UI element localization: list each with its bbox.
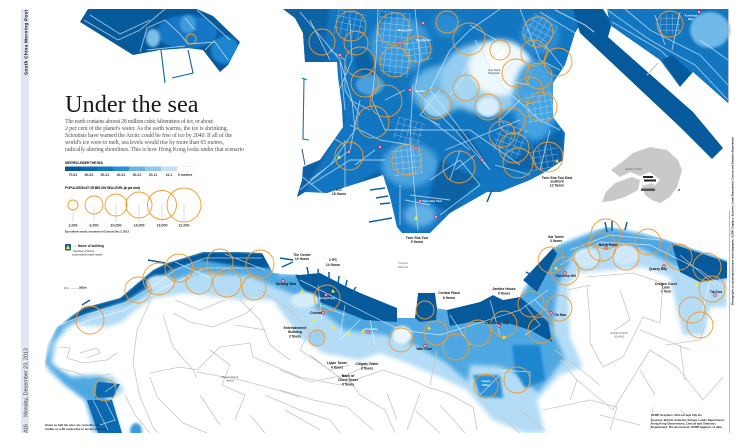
place labels: Hong Kong Island: Hong Kong [319, 296, 335, 300]
place labels: Kowloon: Kowloon [685, 14, 697, 18]
place labels: Hong Kong Island: 9 floors [498, 292, 510, 296]
place labels: Hong Kong Island: Bank of [342, 374, 355, 378]
place labels: Kowloon: Yau Ma Tei [415, 38, 431, 42]
intro text: world's ice were to melt, sea levels would rise by more than 65 metres, [65, 140, 224, 146]
newspaper name: South China Morning Post [23, 10, 28, 75]
place labels: Hong Kong Island: Dragon Court [655, 282, 678, 286]
scale bar [64, 286, 87, 290]
legend: metres under the sea: 70-61 [69, 173, 77, 177]
Hong Kong locator map [602, 147, 682, 203]
legend: population circles: 6,000 [90, 224, 98, 228]
place labels: Kowloon: Bay [688, 17, 694, 21]
intro text: 2 per cent of the planet's water. As the earth warms, the ice is shrinking. [65, 125, 228, 132]
footnote: left: Given as half the sites are currently not [45, 423, 99, 427]
place labels: Hong Kong Island: Admiralty [364, 327, 378, 331]
place labels: Kowloon: Mountain [488, 71, 500, 75]
place labels: Hong Kong Island: HONG KONG [610, 331, 628, 335]
place labels: Kowloon: Jordan [415, 89, 425, 93]
legend: population circles: 22,000 [178, 224, 190, 228]
place labels: Hong Kong Island: Aberd [226, 378, 234, 382]
legend: population circles: 14,000 [134, 224, 144, 228]
place labels: Kowloon: Tsim Sha Tsui [422, 199, 442, 203]
legend: population circles: 10,000 [110, 224, 122, 228]
place labels: Hong Kong Island: Citigate Tower [355, 362, 379, 366]
title: Under the sea [65, 91, 199, 118]
place labels: Kowloon: 5 floors [411, 240, 423, 244]
place labels: Hong Kong Island: 3 floors [550, 239, 562, 243]
place labels: Hong Kong Island: 3 floors [361, 366, 373, 370]
MTR stations [282, 11, 716, 347]
place labels: Hong Kong Island: China Tower [338, 378, 359, 382]
markers: submerged buildings [300, 155, 699, 338]
place labels: Hong Kong Island: North Point [599, 243, 618, 247]
place labels: Hong Kong Island: Central Plaza [438, 291, 460, 295]
place labels: Hong Kong Island: Lane [662, 286, 670, 290]
place labels: Hong Kong Island: Happy [481, 379, 491, 383]
place labels: Hong Kong Island: Aia Tower [548, 235, 565, 239]
legend: metres under the sea: 0 metres [178, 173, 192, 177]
place labels: Hong Kong Island: Central [310, 311, 322, 315]
intro text [65, 118, 244, 153]
footnote: right: Hong Kong Observatory, Census and Statistics [651, 422, 716, 426]
place labels: Kowloon: seafront [550, 180, 565, 184]
legend: metres under the sea: 20-11 [149, 173, 157, 177]
place labels: Kowloon: Tsim Sha Tsui [406, 236, 428, 240]
Hong Kong locator map: N [677, 189, 681, 191]
legend: population circles: By a whole sector, increases in Census Dec 3, 2013 [65, 230, 129, 234]
place labels: Hong Kong Island: Jardine House [492, 287, 516, 291]
place labels: Hong Kong Island: Quarry Bay [649, 267, 667, 271]
side strip [21, 9, 30, 433]
legend: metres under the sea: 50-41 [101, 173, 109, 177]
page date: Monday, December 23, 2013 [24, 348, 30, 417]
legend: metres under the sea: 10-1 [166, 173, 173, 177]
place labels: Hong Kong Island: 6 floors [443, 296, 455, 300]
place labels: Hong Kong Island: The Center [293, 253, 312, 257]
footnote: right [651, 413, 725, 429]
legend: building marker [65, 244, 104, 256]
footnote: right: SCMP Graphics: Alfie Ho and Ally Ko [651, 413, 702, 417]
legend: population circles: 18,000 [156, 224, 168, 228]
place labels: Hong Kong Island [222, 235, 722, 387]
legend: population circles [65, 186, 201, 234]
place labels: Hong Kong Island: 3 floors [342, 382, 354, 386]
right margin credit: Photographs of submerged features and infographic: SCMP Graphics. Sources: Lands Department, Census and Statistics Department [730, 137, 734, 305]
place labels: Hong Kong Island: Lippo Tower [327, 361, 348, 365]
scale bar: 0 m [64, 286, 70, 290]
place labels: Hong Kong Island: Victoria [398, 261, 408, 265]
place labels: Hong Kong Island: Tai Koo [710, 290, 722, 294]
place labels: Hong Kong Island: Tin Hau [554, 313, 566, 317]
legend: metres under the sea [65, 161, 194, 177]
intro text: Scientists have warned the Arctic could be free of ice by 2040. If all of the [65, 132, 232, 139]
footnote: right: Department, The Economist, SCMP analysis of data [651, 425, 722, 429]
scale bar: 500m [79, 286, 87, 290]
map: West Kowloon corner [80, 9, 240, 84]
place labels: Hong Kong Island: Causeway Bay [485, 321, 509, 325]
footnote: right: Sources: British Antarctic Survey, Lands Department, [651, 418, 725, 422]
map: Hong Kong Island coastal flooding [45, 221, 727, 439]
place labels: Hong Kong Island: Building [288, 330, 302, 334]
legend: population circles: 2,000 [68, 224, 78, 228]
place labels: Hong Kong Island: 2 floors [289, 334, 301, 338]
place labels: Hong Kong Island: 2 IFC [329, 258, 338, 262]
place labels: Hong Kong Island: Fortress Hill [556, 274, 576, 278]
place labels: Hong Kong Island: Entertainment [284, 326, 307, 330]
map: hill roads [58, 273, 723, 433]
piers: north shore [82, 221, 627, 305]
legend: metres under the sea: 40-31 [117, 173, 125, 177]
legend: building marker: Number of floors [73, 249, 95, 253]
legend: population circles: POPULATION AT OR BELOW SEA LEVEL (in per cent) [65, 186, 140, 190]
place labels: Hong Kong Island: 1 floor [661, 290, 672, 294]
legend: building marker: Name of building [78, 244, 104, 248]
place labels: Kowloon: Tsim Sha Tsui East [542, 176, 573, 180]
place labels: Hong Kong Island: Wan Chai [416, 347, 432, 351]
place labels: Hong Kong Island: 4 floors [331, 366, 343, 370]
place labels: Hong Kong Island: Harbour [398, 265, 408, 269]
Hong Kong locator map: HONG KONG [625, 167, 642, 171]
footnote: left [45, 423, 107, 431]
place labels: Kowloon: Lion Rock [488, 68, 501, 72]
map: north-east Kowloon [606, 9, 730, 103]
place labels: Kowloon: 12 floors [550, 184, 564, 188]
right margin rule [728, 9, 730, 433]
legend: metres under the sea: 30-21 [133, 173, 141, 177]
place labels: Kowloon: Mong Kok [398, 28, 413, 32]
place labels: Hong Kong Island: Valley [482, 383, 491, 387]
place labels: Hong Kong Island: Mount Cheek [222, 375, 239, 379]
circles: population [76, 11, 725, 401]
page number: A16 [24, 424, 30, 433]
map: runway and typhoon shelter [302, 9, 723, 165]
map: Kowloon peninsula [283, 9, 578, 233]
place labels: Hong Kong Island: 14 floors [326, 263, 340, 267]
legend: building marker: submerged under water [72, 252, 104, 256]
place labels: Kowloon: ICC [336, 188, 342, 192]
place labels: Hong Kong Island: Sheung Wan [276, 282, 296, 286]
footnote: left: visible on a 3D model due to terrain stresses. [45, 427, 107, 431]
place labels: Hong Kong Island: 10 floors [295, 257, 309, 261]
place labels: Kowloon [332, 14, 697, 244]
intro text: radically altering shorelines. This is how Hong Kong looks under that scenario [65, 147, 244, 153]
legend: metres under the sea: METRES UNDER THE SEA [65, 161, 103, 165]
place labels: Kowloon: 15 floors [332, 192, 346, 196]
place labels: Hong Kong Island: ISLAND [614, 334, 624, 338]
intro text: The earth contains almost 28 million cubic kilometres of ice, or about [65, 118, 213, 125]
legend: metres under the sea: 60-51 [85, 173, 93, 177]
piers: Tsim Sha Tsui [369, 188, 492, 222]
